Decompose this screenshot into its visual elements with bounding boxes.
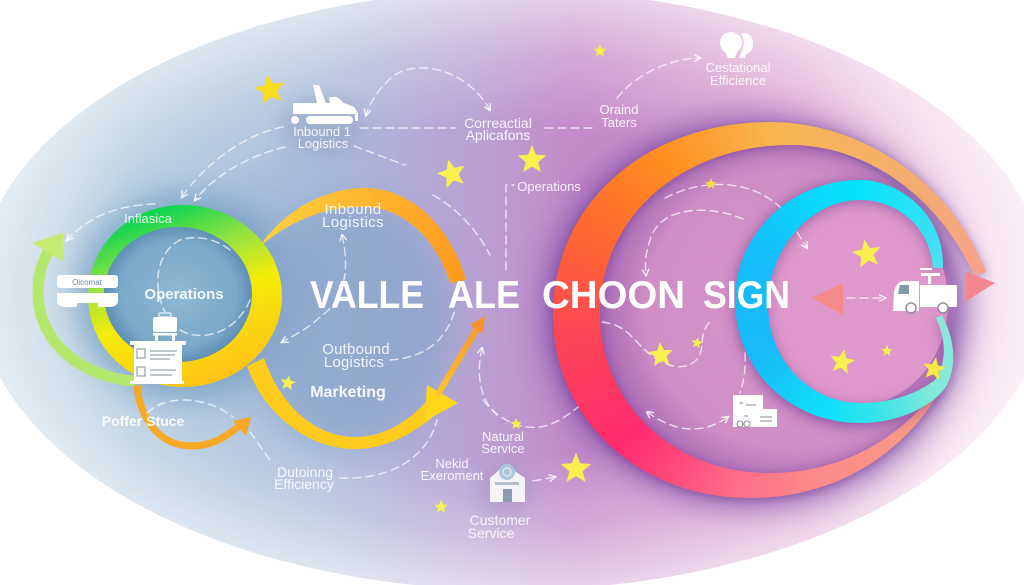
icon: checklist board [130, 341, 186, 384]
label: customer service: Customer [470, 512, 531, 528]
title: SIGN [703, 274, 790, 317]
label: next experiment: Exeroment [421, 468, 484, 483]
label: operations top: Operations [517, 179, 581, 194]
big ring arrowhead [965, 271, 995, 301]
label: orange tater: Oraind [599, 102, 639, 117]
label: power structure: Poffer Stuce [102, 413, 184, 429]
light green arrow [32, 233, 135, 381]
label: outbound logistics: Logistics [324, 354, 384, 371]
label: ring heading: Inflasica [124, 211, 173, 226]
icon: operations platform: Oicomat [72, 278, 103, 287]
label: inbound logistics: Inbound [324, 201, 382, 218]
label: dutoinng efficiency: Dutoinng [277, 464, 333, 480]
label: natural service: Service [481, 441, 525, 456]
title [310, 274, 790, 317]
title: CHOON [542, 274, 685, 317]
stars [252, 44, 947, 513]
star [518, 145, 546, 172]
icon: service card [733, 395, 777, 427]
label: outbound logistics: Outbound [322, 341, 390, 358]
big rainbow ring [550, 120, 990, 504]
star [921, 355, 947, 381]
star [279, 374, 297, 391]
label: orange tater: Taters [601, 115, 637, 130]
title: ALE [448, 274, 520, 317]
cyan ring [729, 178, 960, 432]
icon: customer service building [490, 464, 525, 502]
label: customer service: Service [468, 525, 515, 541]
star [434, 500, 448, 513]
star [850, 237, 883, 268]
star [828, 347, 856, 375]
salmon left arrowhead [812, 283, 843, 315]
label: inbound logistics: Logistics [322, 214, 384, 231]
orange upper arc [262, 188, 466, 283]
label: natural service: Natural [482, 429, 524, 444]
label: dutoinng efficiency: Efficiency [274, 476, 334, 492]
star [705, 178, 717, 189]
star [691, 336, 704, 349]
star [593, 44, 607, 57]
label: efficiency: Efficience [710, 73, 766, 88]
label: top logistics: Inbound 1 [293, 124, 351, 139]
star [434, 156, 469, 189]
label: commercial applications: Aplicafons [466, 127, 530, 143]
green yellow ring [88, 205, 282, 387]
lower orange arrow [137, 385, 251, 446]
title: VALLE [310, 274, 424, 317]
star [561, 453, 591, 482]
label: commercial applications: Correactial [464, 115, 532, 131]
star [510, 418, 522, 429]
label: next experiment: Nekid [435, 456, 469, 471]
icon: luggage [153, 313, 177, 341]
label: efficiency: Cestational [705, 60, 771, 75]
label: marketing: Marketing [310, 384, 386, 401]
icon: brain head [720, 32, 753, 58]
yellow lower arrow [247, 358, 458, 449]
dashed connectors [67, 58, 885, 481]
star [881, 345, 893, 356]
star [648, 341, 674, 367]
orange double arrow [437, 316, 485, 396]
star [252, 72, 287, 105]
label: top logistics: Logistics [298, 136, 349, 151]
icon: operations platform [57, 275, 118, 307]
label: operations: Operations [144, 286, 224, 303]
icon: delivery truck [893, 268, 957, 313]
icon: inbound truck [291, 85, 358, 124]
